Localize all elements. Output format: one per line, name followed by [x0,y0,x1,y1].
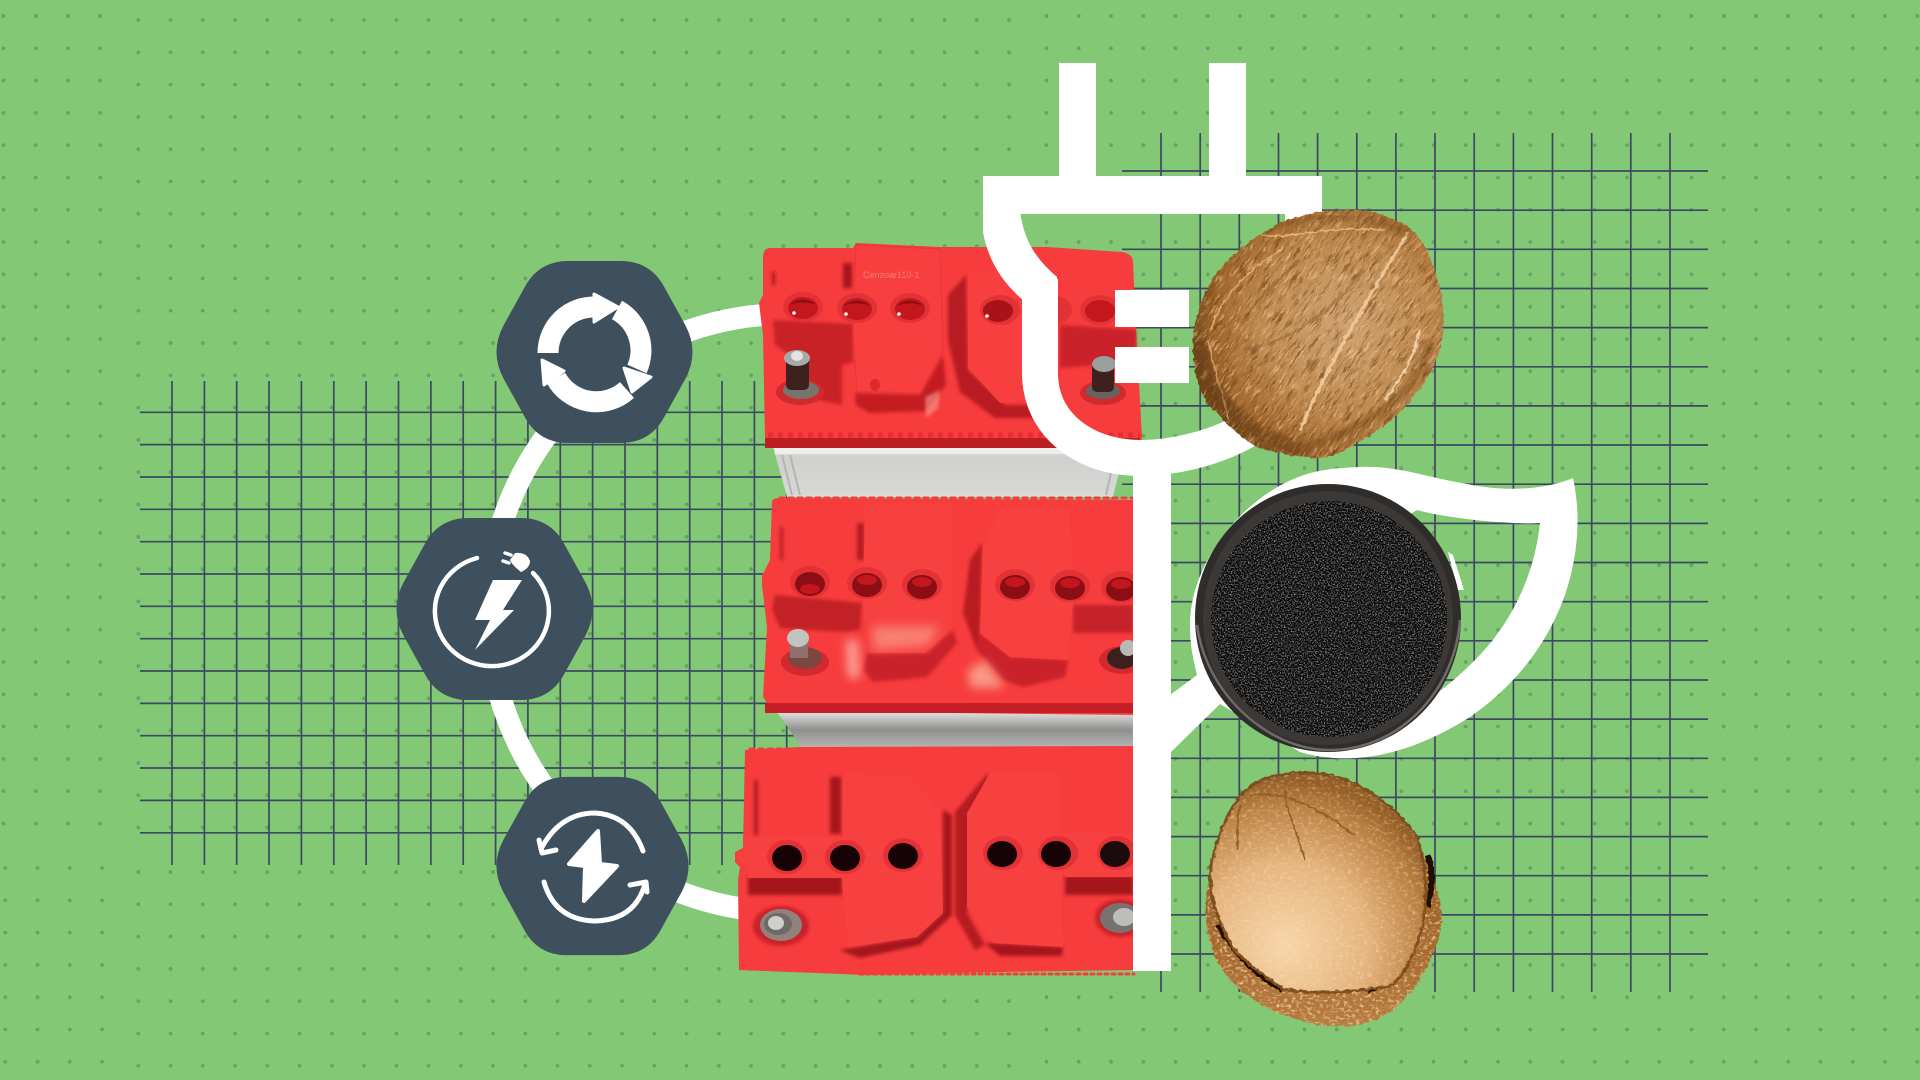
coconut [1192,208,1444,459]
bowl of activated carbon [1195,484,1461,752]
right grid [1122,133,1708,992]
leaf outline [1133,467,1578,760]
left grid [140,381,800,865]
terminal post right [1095,899,1145,937]
battery 2 [762,498,1145,748]
coconut shell halves [1205,770,1442,1027]
icon: power bolt in ring with plug [435,553,549,666]
carbon granules [1211,501,1447,737]
icon: recycle arrows [542,294,651,402]
terminal post right [1099,640,1145,674]
upper shell interior [1208,770,1428,995]
battery label: Cenzoar110-1 [863,270,919,280]
terminal post left [781,629,829,676]
stem [1133,440,1171,971]
connector arc [488,314,770,912]
terminal post right [1080,356,1126,405]
hexagon: recycle [496,261,692,443]
hexagon: energy cycle [496,777,689,955]
hexagon: charging [396,518,592,700]
battery 3 [735,746,1145,975]
plug outline [983,63,1322,458]
terminal post left [776,350,824,405]
icon: bolt between cycle arrows [539,813,647,921]
battery 1 [759,243,1142,497]
terminal post left [753,906,809,946]
lower shell [1205,854,1442,1027]
battery stack [735,243,1145,975]
